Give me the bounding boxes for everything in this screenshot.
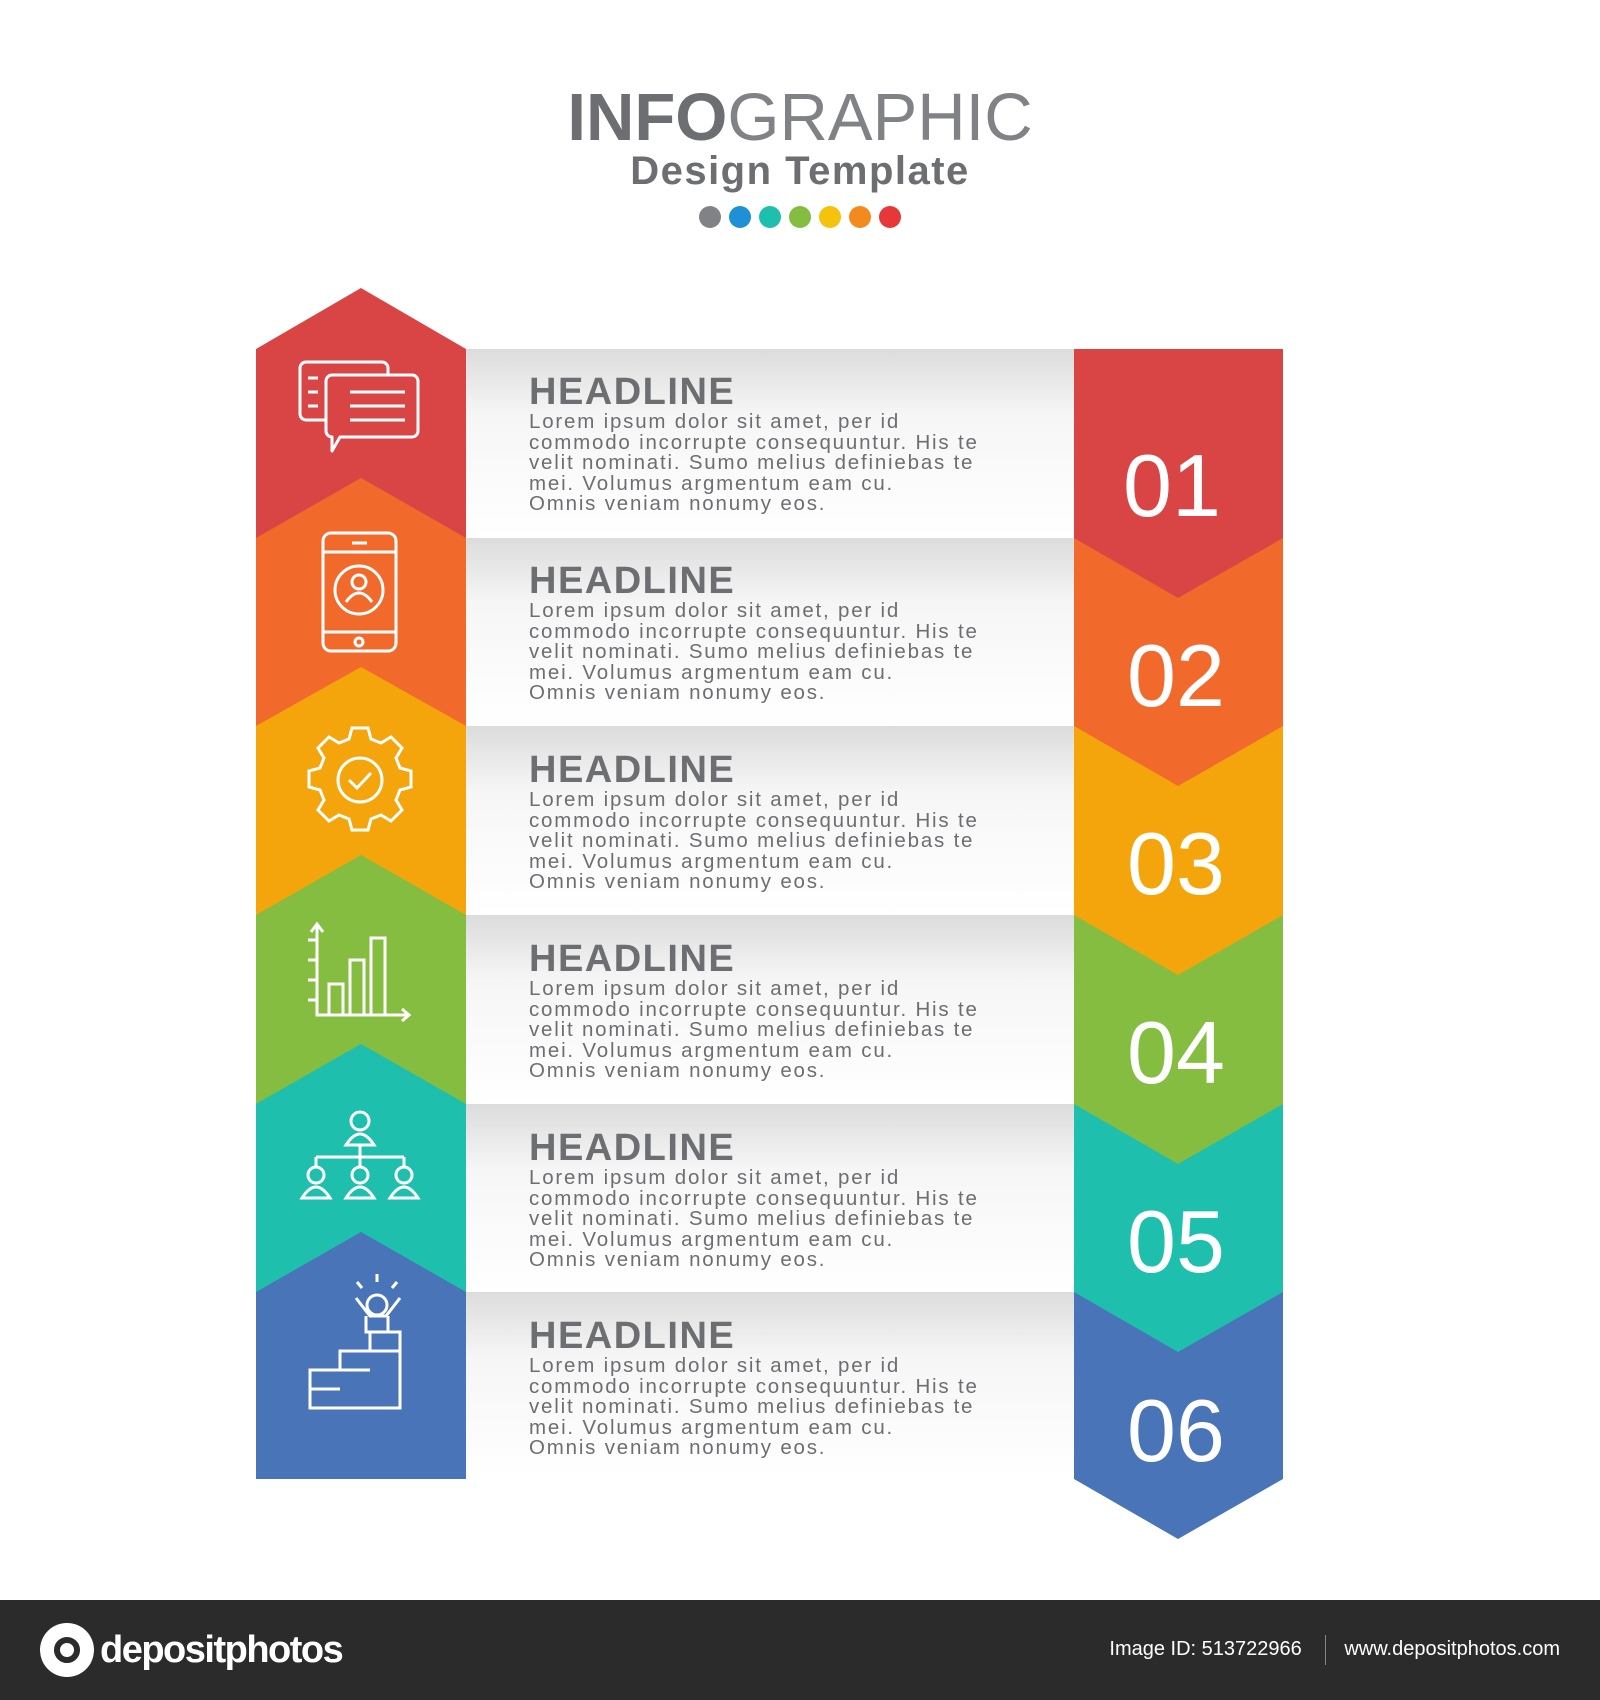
numbers: 01 (1123, 436, 1221, 535)
text: Omnis veniam nonumy eos. (529, 681, 826, 704)
text: Omnis veniam nonumy eos. (529, 870, 826, 893)
text: Lorem ipsum dolor sit amet, per id (529, 599, 900, 622)
footer info: Image ID: 513722966 www.depositphotos.com (1109, 1638, 1560, 1660)
icon: success stairs (310, 1274, 400, 1408)
numbers (1123, 436, 1225, 1480)
row texts: Omnis veniam nonumy eos. (529, 492, 826, 515)
text: Lorem ipsum dolor sit amet, per id (529, 788, 900, 811)
text: mei. Volumus argmentum eam cu. (529, 1039, 894, 1062)
text: Omnis veniam nonumy eos. (529, 1248, 826, 1271)
subtitle: Design Template (630, 149, 970, 193)
title: INFOGRAPHIC (567, 80, 1033, 155)
text: HEADLINE (529, 749, 735, 791)
left chevron column (256, 288, 466, 1479)
row texts (529, 371, 979, 515)
text: HEADLINE (529, 560, 735, 602)
icon: gear (309, 728, 411, 830)
color dots (699, 206, 901, 228)
text: HEADLINE (529, 1127, 735, 1169)
text: Omnis veniam nonumy eos. (529, 1436, 826, 1459)
row texts: HEADLINE (529, 371, 735, 413)
numbers: 06 (1127, 1381, 1225, 1480)
row texts: Lorem ipsum dolor sit amet, per id (529, 410, 900, 433)
footer logo: depositphotos (100, 1628, 342, 1670)
icon: org (302, 1112, 418, 1198)
text: commodo incorrupte consequuntur. His te (529, 1375, 979, 1398)
text: mei. Volumus argmentum eam cu. (529, 1416, 894, 1439)
numbers: 02 (1127, 626, 1225, 725)
footer logo (40, 1623, 342, 1677)
text: mei. Volumus argmentum eam cu. (529, 1228, 894, 1251)
text: Lorem ipsum dolor sit amet, per id (529, 977, 900, 1000)
row texts: velit nominati. Sumo melius definiebas te (529, 451, 974, 474)
text: mei. Volumus argmentum eam cu. (529, 661, 894, 684)
numbers: 03 (1127, 814, 1225, 913)
text: velit nominati. Sumo melius definiebas te (529, 829, 974, 852)
text: commodo incorrupte consequuntur. His te (529, 998, 979, 1021)
icon: chat (300, 362, 418, 451)
text: velit nominati. Sumo melius definiebas te (529, 1018, 974, 1041)
text: commodo incorrupte consequuntur. His te (529, 809, 979, 832)
icon: phone (323, 533, 396, 651)
text bands (466, 349, 1074, 1479)
footer bar (0, 1600, 1600, 1700)
numbers: 05 (1127, 1192, 1225, 1291)
text: velit nominati. Sumo melius definiebas te (529, 1207, 974, 1230)
text: velit nominati. Sumo melius definiebas te (529, 1395, 974, 1418)
text: commodo incorrupte consequuntur. His te (529, 1187, 979, 1210)
text: Lorem ipsum dolor sit amet, per id (529, 1166, 900, 1189)
row texts: mei. Volumus argmentum eam cu. (529, 472, 894, 495)
text: mei. Volumus argmentum eam cu. (529, 850, 894, 873)
text: Lorem ipsum dolor sit amet, per id (529, 1354, 900, 1377)
text: velit nominati. Sumo melius definiebas te (529, 640, 974, 663)
numbers: 04 (1127, 1003, 1225, 1102)
icon: chart (308, 924, 409, 1021)
text: Omnis veniam nonumy eos. (529, 1059, 826, 1082)
text: HEADLINE (529, 1315, 735, 1357)
text: HEADLINE (529, 938, 735, 980)
right number column (1074, 349, 1283, 1539)
row texts: commodo incorrupte consequuntur. His te (529, 431, 979, 454)
text: commodo incorrupte consequuntur. His te (529, 620, 979, 643)
